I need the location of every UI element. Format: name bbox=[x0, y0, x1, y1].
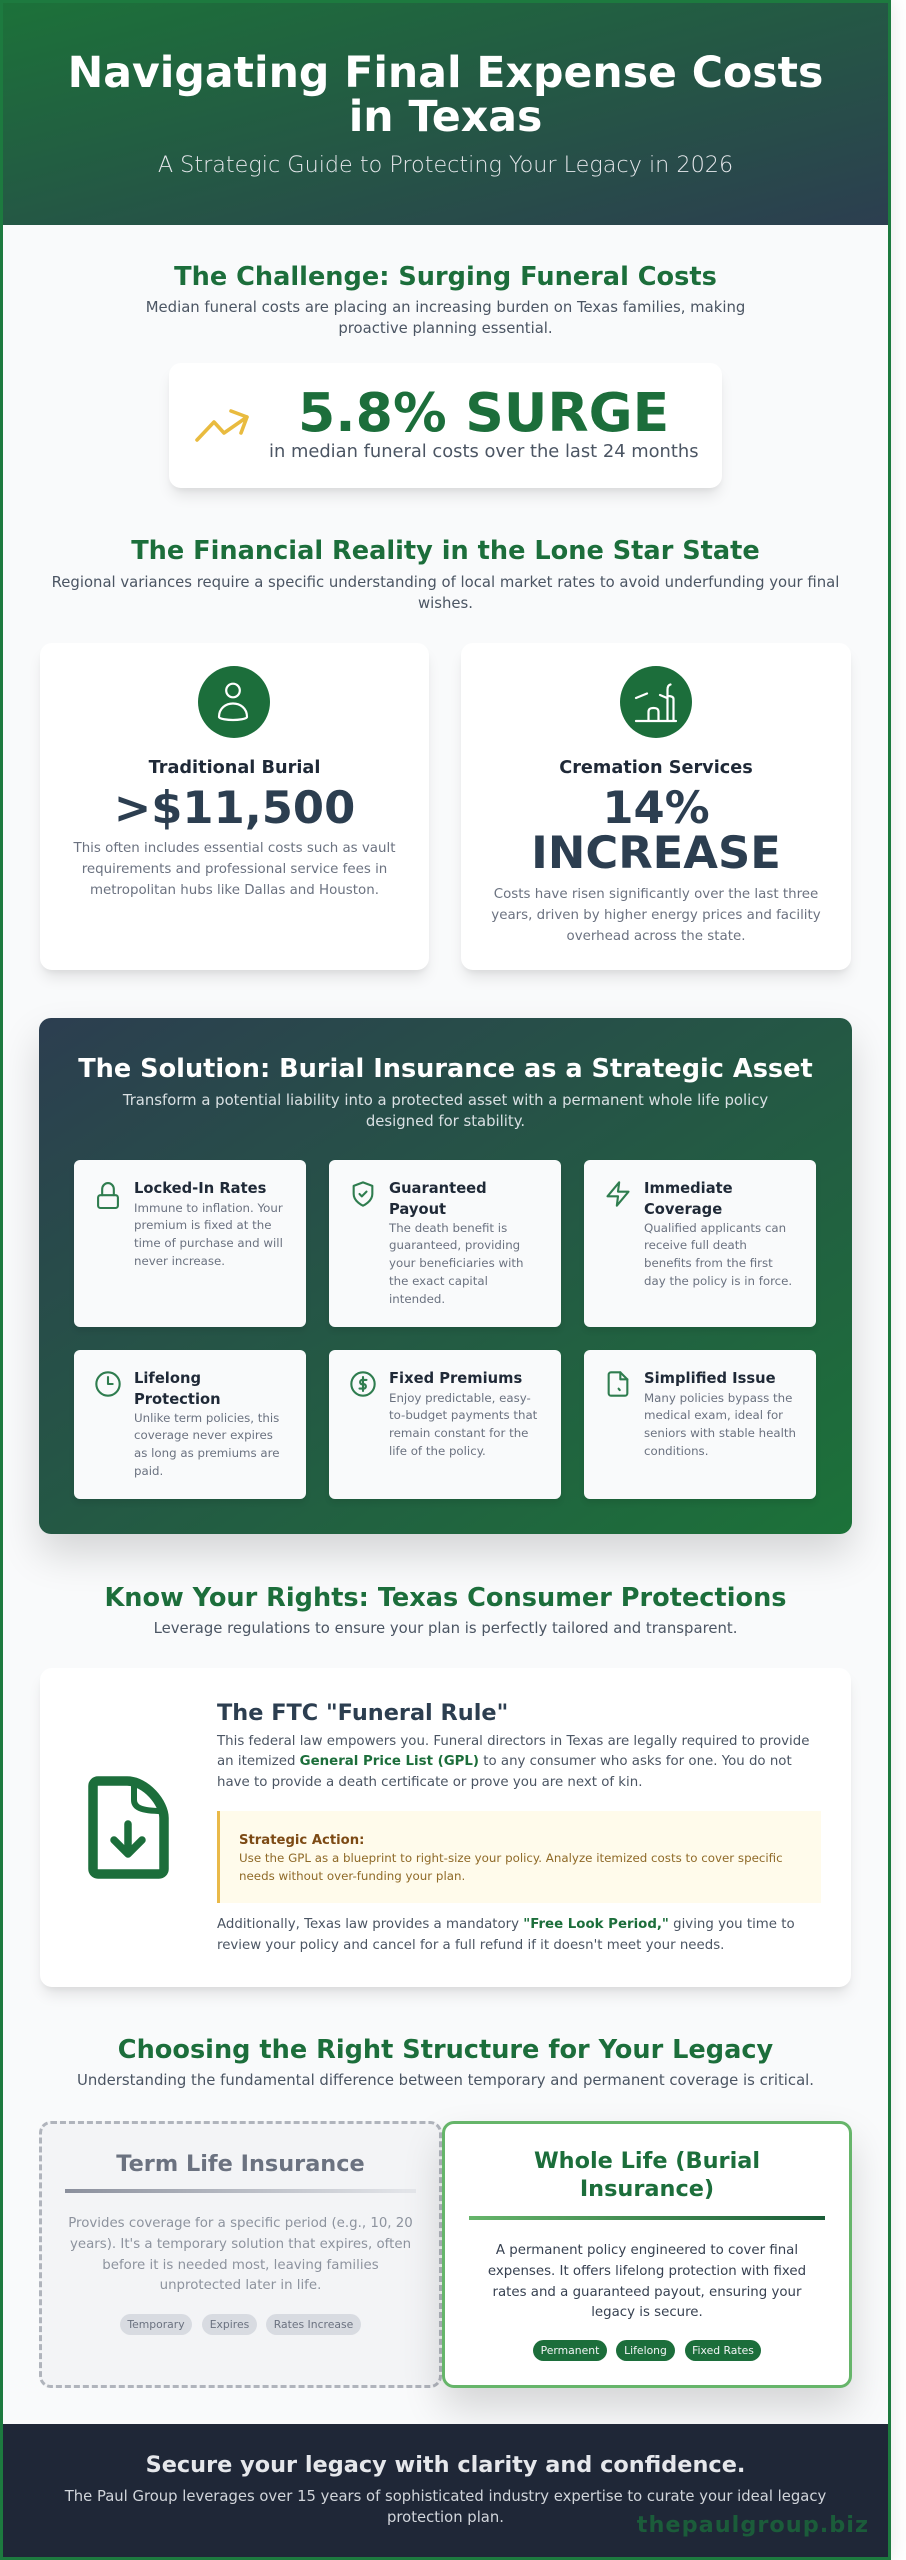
feature text bbox=[134, 1410, 280, 1478]
feature text: medical exam, ideal for bbox=[644, 1408, 783, 1422]
heading: right structure: Choosing the Right Structure for Your Legacy bbox=[118, 2035, 773, 2065]
free look text: Additionally, Texas law provides a mandatory "Free Look Period," giving you time to bbox=[217, 1917, 795, 1932]
solution intro: Transform a potential liability into a protected asset with a permanent whole life policy bbox=[123, 1091, 768, 1109]
feature title bbox=[134, 1370, 221, 1408]
feature title: Locked-In Rates bbox=[134, 1180, 266, 1197]
whole life tags bbox=[533, 2340, 761, 2361]
description: This often includes essential costs such as vault bbox=[74, 841, 395, 856]
card title: Traditional Burial bbox=[149, 758, 320, 778]
term text: Provides coverage for a specific period (e.g., 10, 20 bbox=[68, 2216, 413, 2231]
icon: shield check bbox=[352, 1181, 374, 1207]
icon: lock bbox=[97, 1182, 119, 1209]
heading: financial reality: The Financial Reality in the Lone Star State bbox=[131, 536, 760, 566]
feature text: never increase. bbox=[134, 1254, 225, 1268]
feature text bbox=[644, 1220, 792, 1288]
heading: the challenge: The Challenge: Surging Funeral Costs bbox=[174, 262, 717, 292]
text: rights intro: Leverage regulations to ensure your plan is perfectly tailored and transparent. bbox=[154, 1619, 737, 1637]
icon: trending arrow bbox=[195, 409, 249, 442]
feature text: remain constant for the bbox=[389, 1426, 528, 1440]
feature text: paid. bbox=[134, 1464, 163, 1478]
footer text: The Paul Group leverages over 15 years of sophisticated industry expertise to curate your ideal legacy bbox=[65, 2488, 826, 2504]
feature text: your beneficiaries with bbox=[389, 1256, 524, 1270]
feature text: Many policies bypass the bbox=[644, 1390, 792, 1404]
text: financial intro: wishes. bbox=[418, 594, 473, 612]
feature: immediate coverage bbox=[584, 1160, 816, 1327]
panel: FTC funeral rule bbox=[40, 1668, 851, 1987]
text: challenge intro bbox=[146, 298, 745, 337]
feature text: time of purchase and will bbox=[134, 1236, 283, 1250]
feature text bbox=[388, 1220, 524, 1306]
icon: lightning bolt bbox=[606, 1181, 630, 1207]
text: challenge intro: proactive planning essential. bbox=[338, 319, 553, 337]
icon: document download bbox=[88, 1776, 169, 1879]
feature: locked-in rates bbox=[74, 1160, 306, 1327]
feature text: day the policy is in force. bbox=[644, 1274, 792, 1288]
free look text: review your policy and cancel for a full refund if it doesn't meet your needs. bbox=[217, 1938, 724, 1953]
feature title: Simplified Issue bbox=[644, 1370, 776, 1387]
rule title: The FTC "Funeral Rule" bbox=[217, 1700, 508, 1726]
feature: lifelong protection bbox=[74, 1350, 306, 1499]
feature title: Payout bbox=[389, 1201, 446, 1218]
rule text: have to provide a death certificate or prove you are next of kin. bbox=[217, 1775, 642, 1790]
term tags: Rates Increase bbox=[274, 2318, 353, 2331]
text: financial intro bbox=[52, 573, 839, 612]
term tags: Expires bbox=[210, 2318, 249, 2331]
text: financial intro: Regional variances require a specific understanding of local market rates to avoid underfunding your final bbox=[52, 573, 839, 591]
callout text: Use the GPL as a blueprint to right-size your policy. Analyze itemized costs to cover specific bbox=[239, 1851, 783, 1865]
term text: years). It's a temporary solution that expires, often bbox=[70, 2237, 411, 2252]
whole life title: Insurance) bbox=[580, 2176, 714, 2202]
stat: 5.8% surge: 5.8% SURGE bbox=[298, 380, 669, 444]
feature text bbox=[134, 1200, 283, 1268]
footer text bbox=[64, 2488, 826, 2526]
subtitle: A Strategic Guide to Protecting Your Legacy in 2026 bbox=[158, 152, 733, 178]
text: challenge intro: Median funeral costs are placing an increasing burden on Texas families, making bbox=[146, 298, 745, 316]
free look text bbox=[217, 1917, 795, 1953]
feature text: Immune to inflation. Your bbox=[134, 1200, 283, 1214]
whole life title: Whole Life (Burial bbox=[534, 2148, 760, 2174]
description bbox=[491, 887, 821, 944]
icon: dollar circle bbox=[350, 1371, 376, 1397]
description bbox=[73, 841, 396, 898]
watermark url: thepaulgroup.biz bbox=[637, 2512, 869, 2538]
term text bbox=[68, 2216, 413, 2293]
feature text: guaranteed, providing bbox=[389, 1238, 520, 1252]
description: requirements and professional service fees in bbox=[82, 862, 387, 877]
whole life text: expenses. It offers lifelong protection with fixed bbox=[488, 2264, 806, 2279]
solution intro bbox=[122, 1091, 768, 1130]
feature: simplified issue bbox=[584, 1350, 816, 1499]
feature text: premium is fixed at the bbox=[134, 1218, 272, 1232]
panel: whole life bbox=[442, 2121, 852, 2388]
term text: unprotected later in life. bbox=[160, 2278, 321, 2293]
feature text: benefits from the first bbox=[644, 1256, 773, 1270]
title: Navigating Final Expense Costs bbox=[68, 48, 823, 98]
whole life divider bbox=[469, 2216, 825, 2220]
feature: fixed premiums bbox=[329, 1350, 561, 1499]
term tags: Temporary bbox=[127, 2318, 185, 2331]
feature title: Guaranteed bbox=[389, 1180, 487, 1197]
term title: Term Life Insurance bbox=[116, 2151, 365, 2177]
stat caption: in median funeral costs over the last 24 months bbox=[269, 441, 699, 462]
feature text: seniors with stable health bbox=[644, 1426, 796, 1440]
solution heading: The Solution: Burial Insurance as a Strategic Asset bbox=[78, 1054, 813, 1084]
icon: crematorium bbox=[620, 666, 692, 738]
feature title: Coverage bbox=[644, 1201, 722, 1218]
feature text: to-budget payments that bbox=[389, 1408, 537, 1422]
feature title: Immediate bbox=[644, 1180, 733, 1197]
stat: increase: INCREASE bbox=[531, 826, 781, 878]
feature text: The death benefit is bbox=[389, 1220, 507, 1234]
panel: traditional burial bbox=[40, 643, 429, 970]
title bbox=[68, 48, 823, 142]
whole life title bbox=[534, 2148, 760, 2202]
rule text: an itemized General Price List (GPL) to any consumer who asks for one. You do not bbox=[217, 1754, 792, 1769]
callout text: needs without over-funding your plan. bbox=[239, 1869, 465, 1883]
whole life text: rates and a guaranteed payout, ensuring your bbox=[492, 2285, 801, 2300]
callout text bbox=[239, 1851, 783, 1883]
icon: clock bbox=[95, 1371, 121, 1397]
footer bbox=[0, 2424, 891, 2560]
solution intro: designed for stability. bbox=[366, 1112, 525, 1130]
whole life text bbox=[488, 2243, 806, 2320]
feature text: Qualified applicants can bbox=[644, 1220, 786, 1234]
feature text: intended. bbox=[389, 1292, 445, 1306]
feature text bbox=[644, 1390, 796, 1458]
stat: increase bbox=[531, 781, 781, 878]
feature title: Protection bbox=[134, 1391, 221, 1408]
description: overhead across the state. bbox=[567, 929, 745, 944]
feature text: the exact capital bbox=[389, 1274, 488, 1288]
feature text: as long as premiums are bbox=[134, 1446, 280, 1460]
card title: Cremation Services bbox=[559, 758, 753, 778]
stat: increase: 14% bbox=[602, 781, 710, 834]
callout title: Strategic Action: bbox=[239, 1833, 364, 1848]
footer text: protection plan. bbox=[387, 2508, 504, 2526]
whole life tags: Permanent bbox=[541, 2344, 599, 2357]
feature title bbox=[389, 1180, 487, 1218]
term text: before it is needed most, leaving families bbox=[102, 2258, 379, 2273]
panel: surge stat bbox=[169, 363, 722, 488]
feature text: receive full death bbox=[644, 1238, 747, 1252]
icon: document bbox=[608, 1371, 628, 1397]
term tags bbox=[120, 2314, 361, 2335]
whole life text: legacy is secure. bbox=[591, 2305, 703, 2320]
feature text: coverage never expires bbox=[134, 1428, 273, 1442]
description: years, driven by higher energy prices and facility bbox=[491, 908, 821, 923]
footer headline: Secure your legacy with clarity and confidence. bbox=[146, 2452, 745, 2478]
feature text: Unlike term policies, this bbox=[134, 1410, 279, 1424]
stat: price: >$11,500 bbox=[114, 781, 355, 834]
title: in Texas bbox=[349, 92, 542, 142]
feature: guaranteed payout bbox=[329, 1160, 561, 1327]
heading: know your rights: Know Your Rights: Texas Consumer Protections bbox=[104, 1583, 787, 1613]
feature title bbox=[644, 1180, 733, 1218]
whole life tags: Lifelong bbox=[624, 2344, 667, 2357]
whole life tags: Fixed Rates bbox=[692, 2344, 754, 2357]
feature title: Lifelong bbox=[134, 1370, 201, 1387]
text: structure intro: Understanding the fundamental difference between temporary and permanent coverage is critical. bbox=[77, 2071, 814, 2089]
feature text: Enjoy predictable, easy- bbox=[389, 1390, 531, 1404]
feature title: Fixed Premiums bbox=[389, 1370, 522, 1387]
panel: the solution bbox=[39, 1018, 852, 1534]
feature text bbox=[389, 1390, 537, 1458]
header banner bbox=[0, 0, 891, 225]
term divider bbox=[65, 2189, 416, 2193]
whole life text: A permanent policy engineered to cover final bbox=[496, 2243, 798, 2258]
feature text: conditions. bbox=[644, 1444, 708, 1458]
feature text: life of the policy. bbox=[389, 1444, 486, 1458]
callout: strategic action bbox=[217, 1811, 821, 1903]
panel: cremation services bbox=[461, 643, 851, 970]
panel: term life bbox=[39, 2121, 442, 2388]
rule text: This federal law empowers you. Funeral directors in Texas are legally required to provide bbox=[217, 1734, 809, 1748]
description: Costs have risen significantly over the last three bbox=[494, 887, 818, 902]
rule text bbox=[216, 1734, 809, 1790]
icon: person bbox=[198, 666, 270, 738]
description: metropolitan hubs like Dallas and Houston. bbox=[90, 883, 379, 898]
